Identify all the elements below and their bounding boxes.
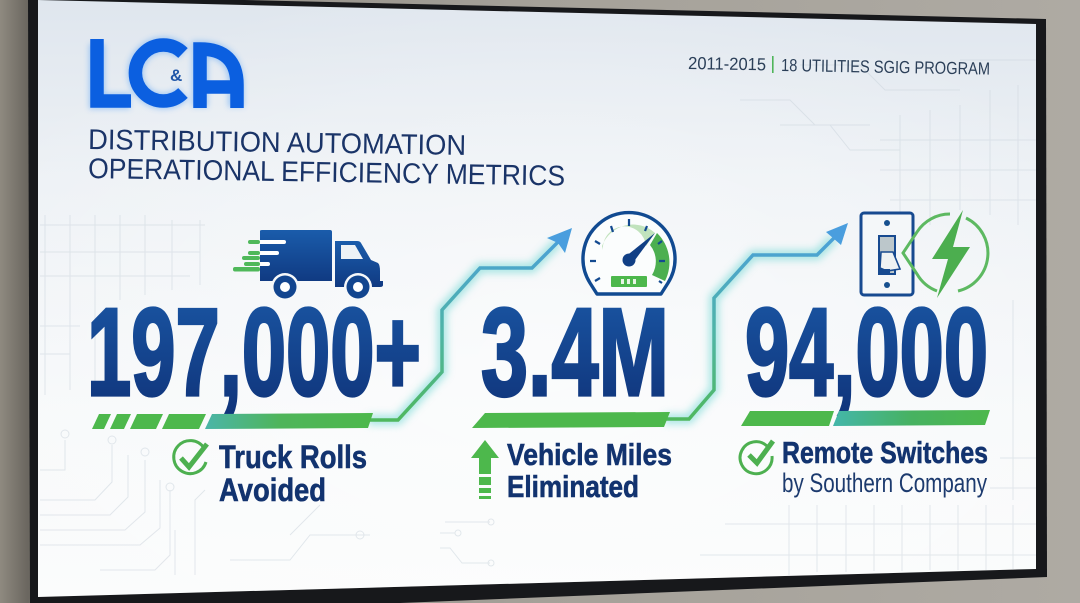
label: Remote Switches [782,435,988,470]
connector arrow 1 [368,228,572,420]
number: 3.4M [481,284,669,422]
label: Vehicle Miles [507,437,672,472]
title line 2: OPERATIONAL EFFICIENCY METRICS [88,153,565,192]
program label: 2011-2015 [688,53,766,74]
label: Eliminated [507,469,639,504]
progress bar [472,412,670,428]
icon: truck [233,230,383,301]
icon: speedometer [583,213,675,294]
logo ampersand: & [170,66,182,85]
background grids and circuit traces [40,60,1036,575]
icon: wall switch [861,213,913,295]
program label: 18 UTILITIES SGIG PROGRAM [781,55,990,79]
metric 3: remote switches [740,210,990,498]
metric 1: truck rolls [87,230,421,508]
label [782,435,988,498]
icon: energy bolt [903,210,988,298]
logo letters [97,39,237,108]
label: Truck Rolls [219,439,367,475]
icon: check [174,441,207,474]
connector arrow 2 [664,223,848,419]
label: Avoided [219,472,326,508]
label [219,439,367,508]
metric 2: vehicle miles [471,213,675,504]
title [88,124,565,192]
number: 197,000+ [87,284,421,422]
label: by Southern Company [782,468,987,498]
label [507,437,672,504]
progress bar [92,413,373,429]
logo: LCA [97,39,237,108]
icon: up arrow [471,440,499,499]
title line 1: DISTRIBUTION AUTOMATION [88,124,466,162]
progress bar [741,410,990,426]
logo glow [97,44,236,107]
program label [688,53,990,79]
icon: check [740,441,773,474]
